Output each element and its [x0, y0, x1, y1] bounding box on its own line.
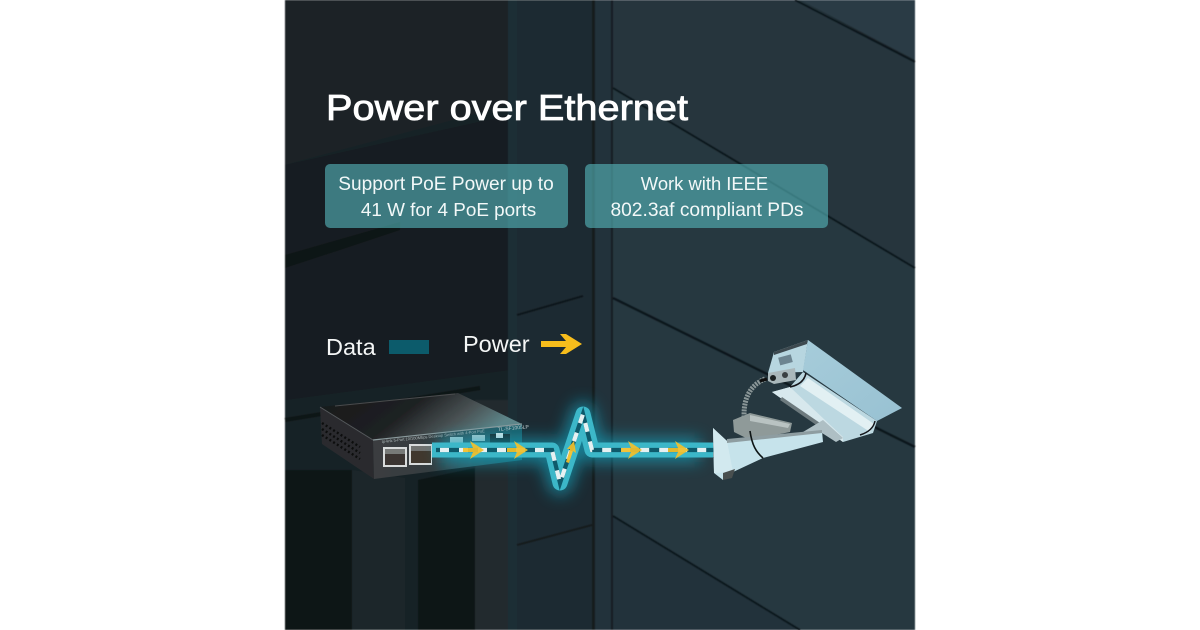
device label: TL-SF1005LP	[498, 424, 530, 433]
security camera	[713, 340, 902, 480]
housing body	[772, 372, 877, 442]
rear face	[768, 340, 808, 373]
feature box: PoE power budget: Support PoE Power up to	[338, 174, 554, 195]
legend: power: Power	[463, 331, 530, 357]
junction box	[733, 413, 792, 440]
network switch	[320, 393, 530, 479]
feature box: PoE power budget: 41 W for 4 PoE ports	[361, 200, 536, 221]
black cable	[750, 431, 763, 458]
feature box: IEEE compliance: Work with IEEE	[641, 173, 768, 194]
feature box: IEEE compliance	[585, 164, 828, 228]
sun shield	[803, 340, 902, 421]
vent holes	[322, 423, 360, 459]
photo background: building corner	[285, 0, 915, 630]
connectors	[768, 368, 796, 384]
ports	[383, 433, 510, 467]
legend: data	[326, 334, 429, 360]
feature box: IEEE compliance: 802.3af compliant PDs	[610, 200, 804, 221]
legend: power	[463, 331, 582, 357]
network switch: tp-link 5-Port 10/100Mbps Desktop Switch with 4-Port PoE	[382, 428, 485, 444]
feature box: PoE power budget	[325, 164, 568, 228]
data and power cable	[432, 414, 730, 483]
legend: data: Data	[326, 334, 377, 360]
power arrows	[463, 441, 689, 463]
wall bracket	[713, 428, 823, 480]
title: Power over Ethernet	[326, 87, 688, 128]
conduit	[744, 379, 765, 426]
mount arm	[803, 420, 843, 442]
